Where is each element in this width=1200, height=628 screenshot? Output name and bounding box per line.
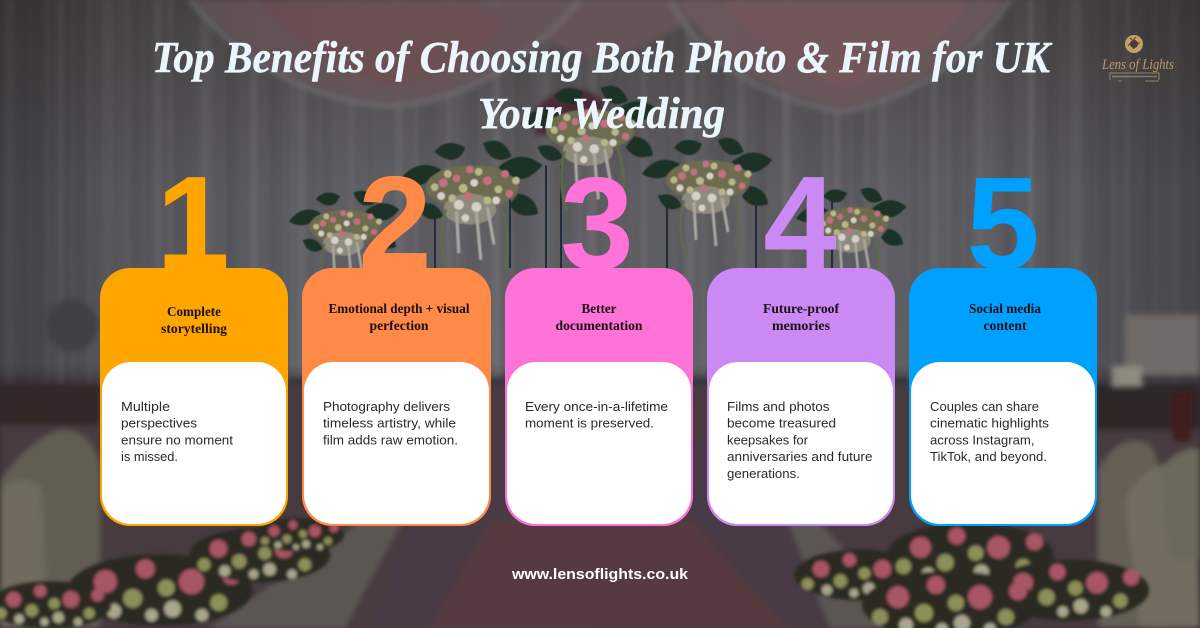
heading: perfection [370, 318, 429, 333]
title [152, 33, 1052, 138]
logo: Lens of Lights [1101, 37, 1174, 81]
body text: generations. [727, 466, 800, 481]
title: Top Benefits of Choosing Both Photo & Film for UK [152, 33, 1052, 82]
heading: Better [582, 301, 616, 316]
body text: Films and photos [727, 399, 830, 414]
panel: emotional depth + visual perfection [302, 149, 491, 526]
body text: timeless artistry, while [323, 416, 456, 430]
body text: TikTok, and beyond. [930, 449, 1047, 464]
panel: complete storytelling [100, 149, 288, 526]
heading: content [984, 318, 1027, 333]
logo: Lens of Lights: Lens of Lights [1101, 57, 1174, 73]
heading: Complete [167, 304, 221, 319]
body text: ensure no moment [121, 432, 233, 448]
body text: moment is preserved. [525, 416, 654, 430]
body text: is missed. [121, 449, 178, 464]
body text: keepsakes for [727, 432, 809, 448]
body text: across Instagram, [930, 432, 1034, 448]
body text: Photography delivers [323, 399, 451, 414]
heading: Emotional depth + visual [328, 301, 470, 316]
body text: cinematic highlights [930, 416, 1050, 430]
heading: Social media [969, 301, 1041, 316]
body text: become treasured [727, 416, 836, 430]
body text: film adds raw emotion. [323, 432, 458, 448]
body text: perspectives [121, 416, 198, 430]
body text: Every once-in-a-lifetime [525, 399, 668, 414]
number 2: 2 [358, 149, 432, 296]
heading: memories [772, 318, 830, 333]
number 3: 3 [560, 150, 634, 297]
body text: Couples can share [930, 399, 1039, 414]
panel: social media content [909, 150, 1097, 526]
title: Your Wedding [478, 89, 725, 138]
number 5: 5 [966, 150, 1040, 297]
panel: future-proof memories [707, 149, 895, 526]
panel: better documentation [505, 150, 693, 526]
website url: www.lensoflights.co.uk [511, 566, 689, 583]
heading: storytelling [161, 321, 227, 336]
heading: Future-proof [763, 301, 840, 316]
number 1: 1 [156, 149, 230, 296]
icon: camera aperture [1128, 37, 1140, 50]
heading: documentation [556, 318, 643, 333]
body text: anniversaries and future [727, 449, 872, 464]
body text: Multiple [121, 399, 170, 414]
number 4: 4 [763, 149, 837, 296]
